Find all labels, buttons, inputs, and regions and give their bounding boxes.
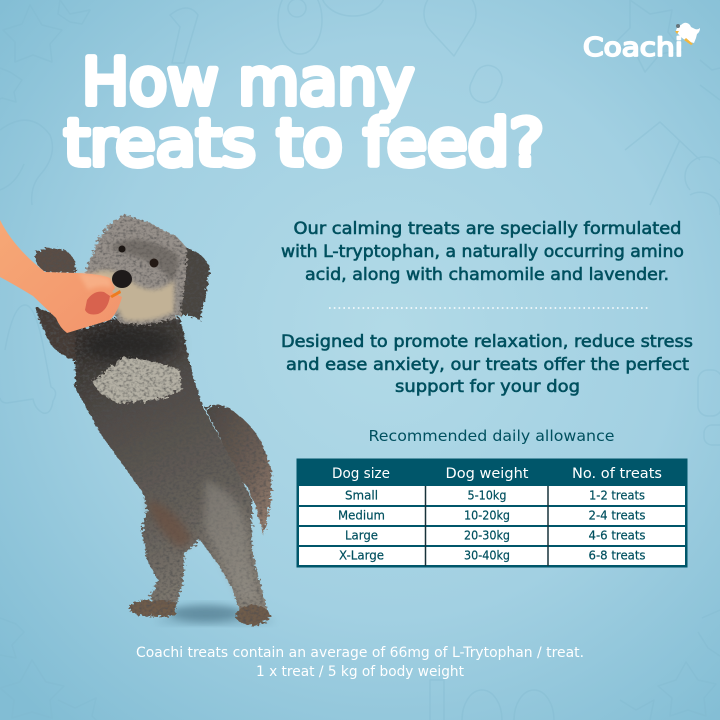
- benefits paragraph: [281, 332, 693, 397]
- table header: Dog weight: [446, 466, 529, 482]
- footnote: 1 x treat / 5 kg of body weight: [256, 664, 464, 680]
- table header: Dog size: [332, 466, 390, 482]
- treat: [110, 290, 121, 298]
- table rows: 1-2 treats: [589, 488, 645, 502]
- intro paragraph: with L-tryptophan, a naturally occurring amino: [281, 242, 684, 262]
- dark chest: [82, 327, 178, 363]
- feet: [130, 600, 270, 625]
- table rows: 6-8 treats: [588, 548, 646, 562]
- table rows: 5-10kg: [468, 488, 506, 502]
- table rows: 30-40kg: [464, 548, 510, 562]
- head: [85, 215, 190, 324]
- table rows: 20-30kg: [464, 528, 510, 542]
- table rows: Large: [345, 528, 378, 542]
- hind leg highlight: [205, 480, 258, 600]
- raised far leg: [35, 307, 80, 360]
- hand feeding treat: [0, 220, 122, 333]
- allowance table: [297, 459, 687, 567]
- benefits paragraph: support for your dog: [395, 377, 580, 397]
- table rows: [338, 488, 646, 562]
- footnote: [136, 645, 584, 680]
- title: [64, 46, 544, 181]
- forehead dark fur: [110, 239, 178, 282]
- table header: [332, 466, 662, 482]
- benefits paragraph: and ease anxiety, our treats offer the perfect: [286, 355, 689, 375]
- dog nose: [112, 270, 132, 288]
- tail: [205, 405, 272, 535]
- table rows: 2-4 treats: [588, 508, 646, 522]
- dog body: [75, 318, 268, 612]
- table rows: Medium: [338, 508, 385, 522]
- far paw: [35, 248, 76, 274]
- chest paw: [92, 357, 182, 403]
- dog photo illustration: [35, 215, 272, 625]
- footnote: Coachi treats contain an average of 66mg of L-Trytophan / treat.: [136, 645, 584, 661]
- belly warm tones: [148, 500, 192, 548]
- title: How many: [82, 46, 414, 120]
- table rows: X-Large: [339, 548, 384, 562]
- intro paragraph: Our calming treats are specially formulated: [294, 219, 682, 239]
- eyes: [118, 246, 126, 252]
- table header: No. of treats: [572, 466, 662, 482]
- dog ground shadow: [155, 605, 275, 625]
- table rows: Small: [345, 488, 378, 502]
- title: treats to feed?: [64, 107, 544, 181]
- logo: Coachi: [583, 23, 700, 63]
- intro paragraph: acid, along with chamomile and lavender.: [305, 265, 669, 285]
- table rows: 4-6 treats: [588, 528, 646, 542]
- logo: Coachi: Coachi: [583, 33, 683, 63]
- table rows: 10-20kg: [464, 508, 510, 522]
- benefits paragraph: Designed to promote relaxation, reduce stress: [281, 332, 693, 352]
- intro paragraph: [281, 219, 684, 285]
- muzzle and beard: [92, 270, 174, 321]
- table heading: Recommended daily allowance: [368, 427, 614, 445]
- ear: [180, 248, 210, 320]
